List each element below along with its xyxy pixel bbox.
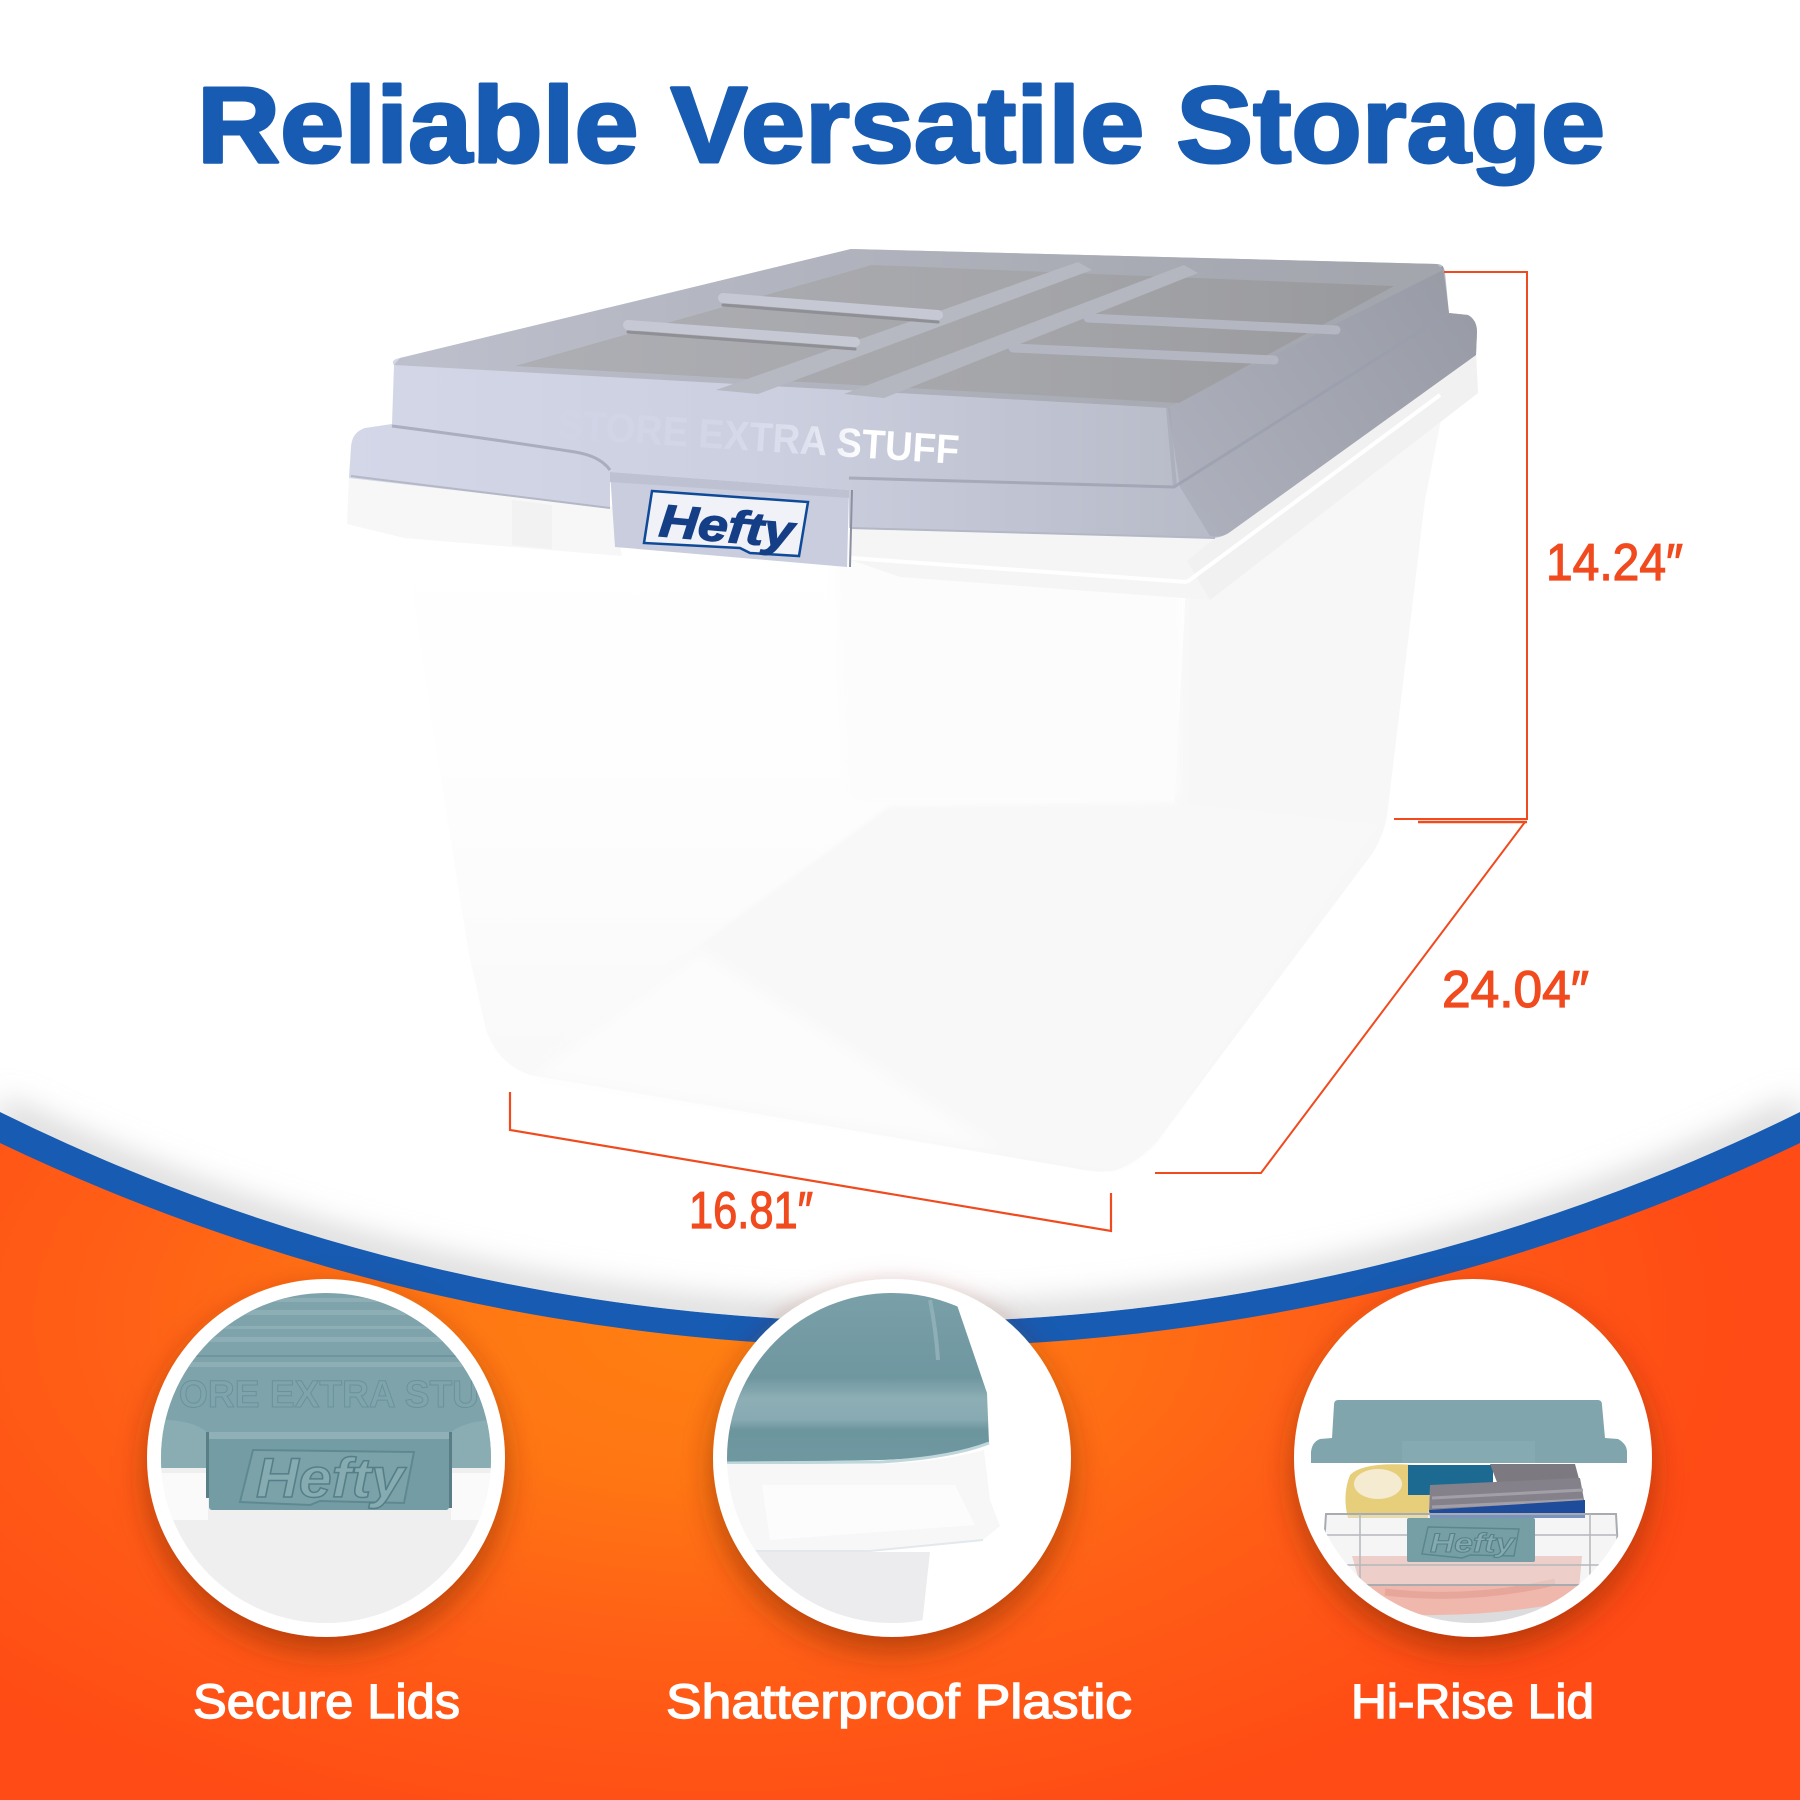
dimension: height bbox=[1394, 272, 1527, 822]
feature circle: secure lids bbox=[147, 1279, 510, 1638]
product: storage bin bbox=[347, 249, 1478, 1172]
lid crease lines bbox=[392, 313, 1449, 487]
dimension: width bbox=[510, 1092, 1111, 1231]
clear tub bbox=[1324, 1514, 1618, 1585]
lid upper rim bbox=[394, 249, 1443, 408]
feature circle: shatterproof plastic bbox=[713, 1279, 1071, 1637]
feature circle: hi-rise lid: Hefty bbox=[1430, 1528, 1516, 1558]
feature circle: secure lids: Hefty bbox=[256, 1446, 407, 1509]
title: Reliable Versatile Storage bbox=[197, 64, 1605, 185]
latch with Hefty logo bbox=[610, 472, 852, 567]
orange background bbox=[0, 1000, 1800, 1800]
lid silhouette bbox=[349, 249, 1477, 538]
white curved panel bbox=[0, 0, 1800, 1322]
depth value: 24.04″ bbox=[1442, 961, 1589, 1019]
logo text: Hefty bbox=[657, 494, 799, 558]
height value: 14.24″ bbox=[1546, 534, 1683, 592]
latch bbox=[1407, 1518, 1535, 1562]
lid ribs bbox=[628, 262, 1336, 398]
bin right face bbox=[1112, 400, 1445, 1171]
raised lid bbox=[1311, 1400, 1627, 1463]
lid right side bbox=[1168, 266, 1477, 536]
clothes bbox=[1345, 1464, 1585, 1615]
lid recessed panel bbox=[515, 265, 1394, 403]
logo plate bbox=[644, 491, 808, 556]
width value: 16.81″ bbox=[689, 1182, 813, 1240]
feature circle: secure lids: ORE EXTRA STU bbox=[179, 1374, 479, 1416]
label: hi-rise lid: Hi-Rise Lid bbox=[1351, 1676, 1594, 1729]
label: shatterproof plastic: Shatterproof Plastic bbox=[666, 1676, 1132, 1729]
dimension: depth bbox=[1155, 822, 1525, 1173]
bin floor bbox=[530, 801, 1379, 1170]
feature circle: hi-rise lid bbox=[1294, 1279, 1652, 1637]
bin right rim bbox=[851, 353, 1478, 600]
blue curved band bbox=[0, 1000, 1800, 1347]
bin left rim bbox=[347, 474, 622, 556]
lid embossed text: STORE EXTRA STUFF bbox=[556, 401, 961, 473]
bin body bbox=[404, 400, 1445, 1172]
label: secure lids: Secure Lids bbox=[193, 1676, 460, 1729]
